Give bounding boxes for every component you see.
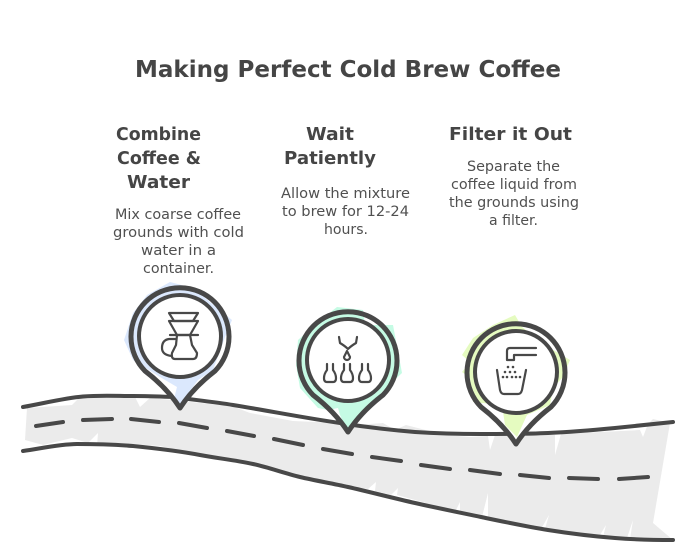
step 1 heading: Coffee & [117, 148, 201, 169]
step 1 heading: Water [127, 172, 190, 193]
step 3 description: the grounds using [449, 195, 579, 211]
step 3 heading: Filter it Out [449, 124, 572, 145]
road top edge [23, 396, 673, 434]
step 1 description: container. [143, 261, 214, 277]
pin 2 inner circle [307, 319, 389, 401]
pin 2 white base [299, 312, 397, 432]
icon: pour-over dripper and carafe [162, 313, 198, 359]
road [23, 396, 673, 540]
step 3 description: coffee liquid from [451, 177, 577, 193]
step 3 description [449, 159, 579, 229]
road surface [25, 397, 673, 540]
road bottom edge [23, 444, 673, 540]
pin 2 mint highlight [296, 307, 402, 432]
step 3 description: Separate the [467, 159, 560, 175]
pin 1 [124, 282, 232, 408]
pin 1 outline [131, 288, 229, 408]
step 1 description: water in a [141, 243, 216, 259]
icon: tap pouring grounds into filter cup [497, 348, 536, 394]
pin 1 blue highlight [124, 282, 232, 408]
step 1 heading: Combine [116, 124, 201, 145]
pin 3 [462, 315, 570, 444]
pin 1 inner circle [139, 295, 221, 377]
step 1 description: Mix coarse coffee [115, 207, 241, 223]
step 2 heading: Patiently [284, 148, 376, 169]
road centre dashes [36, 419, 648, 479]
step 2 description: Allow the mixture [281, 186, 410, 202]
pin 2 [296, 307, 402, 432]
step 2 description: hours. [324, 222, 368, 238]
step 2 heading [284, 124, 376, 169]
pin 3 lime highlight [462, 315, 570, 437]
pin 3 white base [467, 324, 565, 444]
step 3 description: a filter. [489, 213, 538, 229]
step 2 description [281, 186, 410, 238]
pin 3 inner circle [475, 331, 557, 413]
step 2 heading: Wait [306, 124, 354, 145]
step 2 description: to brew for 12-24 [282, 204, 409, 220]
step 1 heading [116, 124, 201, 193]
pin 3 outline [467, 324, 565, 444]
pin 2 outline [299, 312, 397, 432]
step 1 description: grounds with cold [113, 225, 244, 241]
pin 1 white base [131, 288, 229, 408]
step 1 description [113, 207, 244, 277]
title: Making Perfect Cold Brew Coffee [135, 57, 561, 83]
icon: drip and three bottles [324, 337, 371, 382]
